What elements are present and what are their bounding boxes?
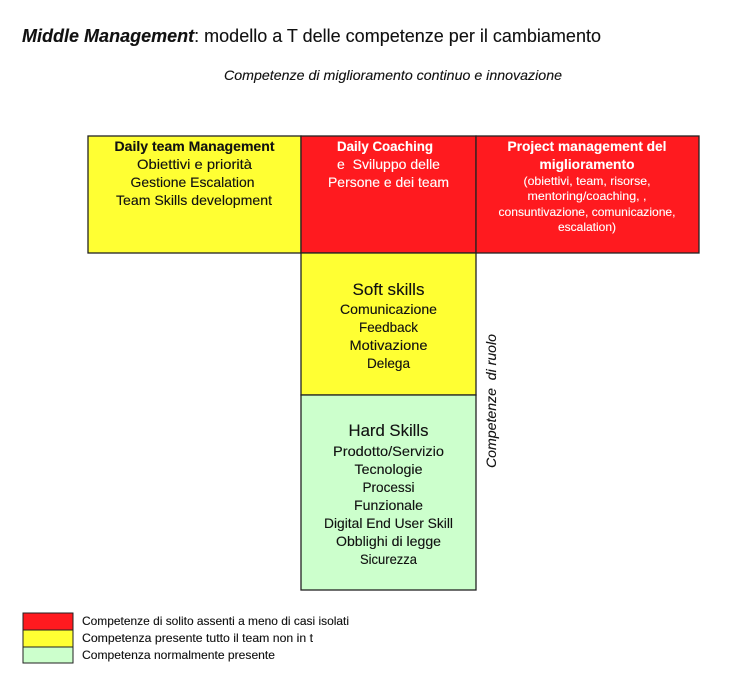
panel: daily team management: Obiettivi e priorità: [137, 156, 252, 172]
panel: hard skills: Tecnologie: [354, 461, 423, 477]
panel: hard skills: Obblighi di legge: [336, 533, 441, 549]
panel: hard skills: Sicurezza: [360, 551, 417, 567]
panel: hard skills: Funzionale: [354, 497, 423, 513]
panel: daily team management: Gestione Escalation: [130, 174, 254, 190]
panel: soft skills: Feedback: [359, 319, 419, 335]
panel: daily team management: Team Skills development: [116, 192, 272, 208]
panel: project management of improvement: escalation): [558, 220, 616, 234]
panel: daily coaching: [301, 136, 476, 253]
legend item: red: Competenze di solito assenti a meno di casi isolati: [82, 614, 349, 628]
panel: daily coaching: Persone e dei team: [328, 174, 449, 190]
subtitle: continuous improvement competences: Competenze di miglioramento continuo e innovazione: [224, 67, 562, 83]
panel: hard skills: Processi: [362, 479, 414, 495]
panel: project management of improvement: Project management del: [508, 138, 666, 154]
title: Middle Management: modello a T delle competenze per il cambiamento: [22, 25, 601, 46]
panel: hard skills: Digital End User Skill: [324, 515, 453, 531]
panel: project management of improvement: miglioramento: [540, 156, 634, 172]
legend item: yellow: Competenza presente tutto il team non in t: [82, 631, 314, 645]
legend: [23, 613, 349, 663]
legend item: red: [23, 613, 349, 630]
panel: project management of improvement: (obiettivi, team, risorse,: [524, 174, 650, 188]
panel: soft skills: Comunicazione: [340, 301, 437, 317]
legend item: green: Competenza normalmente presente: [82, 648, 275, 662]
panel: soft skills: Soft skills: [352, 281, 424, 299]
panel: hard skills: [301, 395, 476, 590]
panel: daily coaching: e Sviluppo delle: [337, 156, 440, 172]
panel: project management of improvement: consuntivazione, comunicazione,: [498, 205, 676, 219]
panel: project management of improvement: mentoring/coaching, ,: [528, 189, 646, 203]
legend item: yellow: [23, 630, 314, 647]
panel: soft skills: Motivazione: [350, 337, 428, 353]
panel: soft skills: [301, 253, 476, 395]
panel: hard skills: Hard Skills: [348, 422, 428, 440]
panel: hard skills: Prodotto/Servizio: [333, 443, 444, 459]
vertical label: role competences: Competenze di ruolo: [483, 334, 499, 468]
legend item: green: [23, 647, 275, 663]
panel: soft skills: Delega: [367, 355, 410, 371]
panel: project management of improvement: [476, 136, 699, 253]
panel: daily coaching: Daily Coaching: [337, 138, 433, 154]
panel: daily team management: Daily team Management: [114, 138, 275, 154]
panel: daily team management: [88, 136, 301, 253]
